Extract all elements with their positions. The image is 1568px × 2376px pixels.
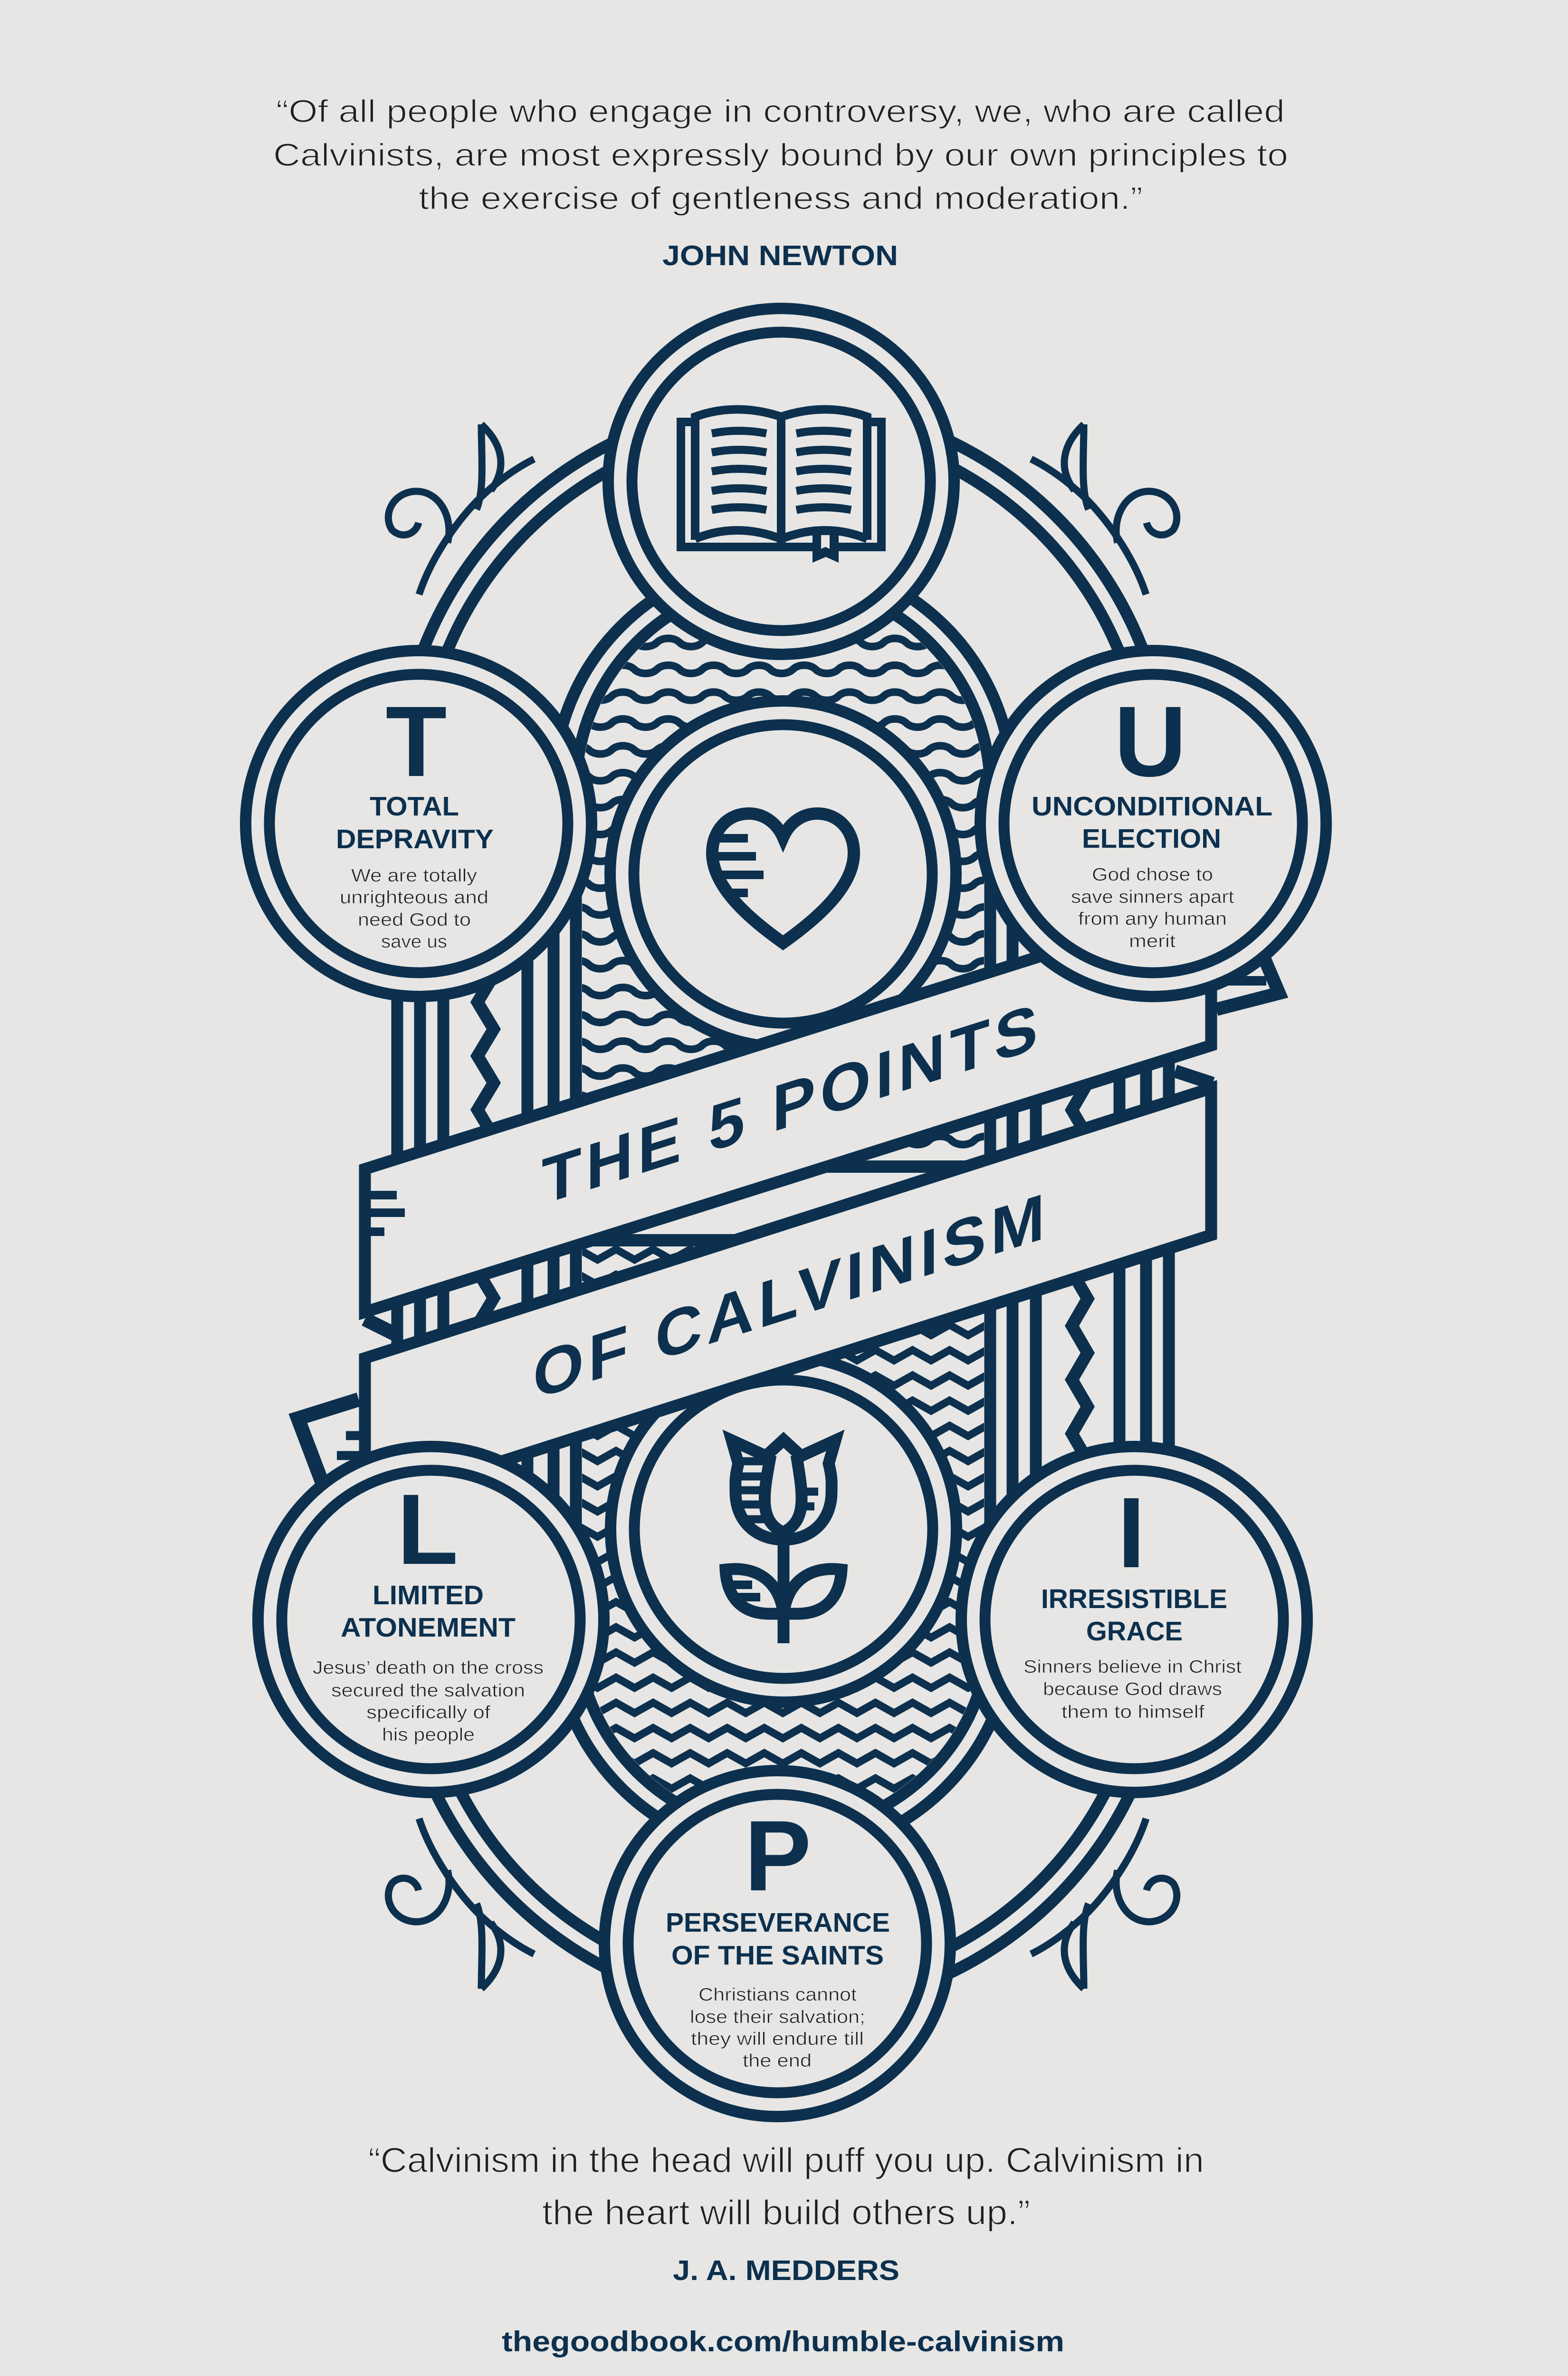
description: they will endure till bbox=[691, 2029, 864, 2049]
heading: DEPRAVITY bbox=[336, 824, 494, 854]
heading bbox=[336, 791, 494, 854]
outer double capsule bbox=[397, 403, 1169, 2011]
description: because God draws bbox=[1043, 1679, 1222, 1699]
description: lose their salvation; bbox=[690, 2007, 865, 2027]
description: them to himself bbox=[1061, 1702, 1205, 1722]
description bbox=[313, 1658, 544, 1745]
top quote attribution: JOHN NEWTON bbox=[662, 240, 898, 271]
medallion: L limited atonement bbox=[258, 1447, 604, 1792]
letter U: U bbox=[1114, 685, 1186, 797]
heading: TOTAL bbox=[370, 791, 459, 822]
description: need God to bbox=[358, 910, 471, 930]
heart medallion bbox=[610, 701, 956, 1047]
medallion: P perseverance of the saints bbox=[604, 1771, 950, 2117]
flourish bottom left bbox=[388, 1819, 534, 1989]
medallion: open book bbox=[608, 308, 954, 654]
description: save us bbox=[381, 932, 447, 952]
heading: IRRESISTIBLE bbox=[1041, 1584, 1227, 1614]
website url: thegoodbook.com/humble-calvinism bbox=[502, 2326, 1064, 2357]
ribbon fold right bbox=[1175, 1071, 1213, 1083]
description: secured the salvation bbox=[331, 1681, 525, 1701]
inner double capsule bbox=[554, 559, 1013, 1855]
pattern divider bars bbox=[582, 1167, 984, 1240]
heading: OF THE SAINTS bbox=[671, 1940, 884, 1971]
letter P: P bbox=[745, 1800, 811, 1912]
tulip medallion bbox=[611, 1356, 956, 1702]
heading: LIMITED bbox=[373, 1580, 484, 1610]
description: We are totally bbox=[351, 866, 477, 886]
medallion: I irresistible grace bbox=[961, 1447, 1307, 1792]
description: from any human bbox=[1078, 909, 1227, 929]
description: specifically of bbox=[366, 1703, 491, 1723]
flourish bottom right bbox=[1031, 1819, 1177, 1989]
description bbox=[1023, 1657, 1242, 1722]
banner: of calvinism bbox=[365, 1088, 1211, 1505]
icon: heart bbox=[712, 814, 854, 943]
bottom quote bbox=[368, 2141, 1204, 2232]
ribbon tail left bbox=[298, 1399, 361, 1485]
heading: ELECTION bbox=[1082, 824, 1221, 854]
right zigzag bbox=[1072, 1002, 1088, 1461]
ribbon fold left bbox=[365, 1319, 399, 1336]
banner: the 5 points bbox=[365, 902, 1211, 1312]
description bbox=[690, 1985, 865, 2071]
description: the end bbox=[743, 2051, 812, 2071]
banner text: THE 5 POINTS bbox=[542, 989, 1038, 1218]
banner bars bbox=[368, 1195, 405, 1232]
heading bbox=[341, 1580, 516, 1643]
description: Jesus’ death on the cross bbox=[313, 1658, 544, 1678]
description: Christians cannot bbox=[698, 1985, 857, 2005]
heading: GRACE bbox=[1086, 1616, 1183, 1647]
medallion: U unconditional election bbox=[980, 651, 1326, 996]
left zigzag bbox=[478, 975, 494, 1459]
description bbox=[1071, 865, 1234, 951]
banner text: OF CALVINISM bbox=[533, 1179, 1045, 1413]
top quote: “Of all people who engage in controversy, we, who are called bbox=[276, 94, 1285, 129]
heading bbox=[666, 1907, 890, 1971]
icon: open book bbox=[681, 410, 881, 563]
heading bbox=[1032, 791, 1272, 854]
description: his people bbox=[382, 1725, 475, 1745]
description: God chose to bbox=[1092, 865, 1213, 885]
letter L: L bbox=[397, 1473, 458, 1585]
flourish top left bbox=[388, 424, 534, 594]
ribbon tail right bbox=[1216, 958, 1279, 1009]
chevron pattern bbox=[582, 1246, 984, 1793]
wave pattern bbox=[582, 634, 984, 1149]
description bbox=[340, 866, 488, 952]
top quote: the exercise of gentleness and moderation.” bbox=[419, 181, 1143, 216]
icon: tulip bbox=[726, 1440, 841, 1643]
description: Sinners believe in Christ bbox=[1023, 1657, 1242, 1677]
vertical stripes bbox=[443, 808, 1119, 1616]
heading bbox=[1041, 1584, 1227, 1647]
top quote: Calvinists, are most expressly bound by our own principles to bbox=[273, 137, 1288, 173]
bottom quote: “Calvinism in the head will puff you up. Calvinism in bbox=[368, 2141, 1204, 2180]
description: save sinners apart bbox=[1071, 887, 1234, 907]
medallion: T total depravity bbox=[246, 651, 592, 996]
description: merit bbox=[1129, 931, 1176, 951]
description: unrighteous and bbox=[340, 888, 488, 908]
top quote bbox=[273, 94, 1288, 216]
flourish top right bbox=[1031, 424, 1177, 594]
bottom quote attribution: J. A. MEDDERS bbox=[673, 2255, 899, 2286]
heading: UNCONDITIONAL bbox=[1032, 791, 1272, 822]
heading: ATONEMENT bbox=[341, 1612, 516, 1643]
letter I: I bbox=[1118, 1476, 1145, 1589]
letter T: T bbox=[386, 685, 447, 797]
bottom quote: the heart will build others up.” bbox=[542, 2194, 1030, 2232]
heading: PERSEVERANCE bbox=[666, 1907, 890, 1938]
